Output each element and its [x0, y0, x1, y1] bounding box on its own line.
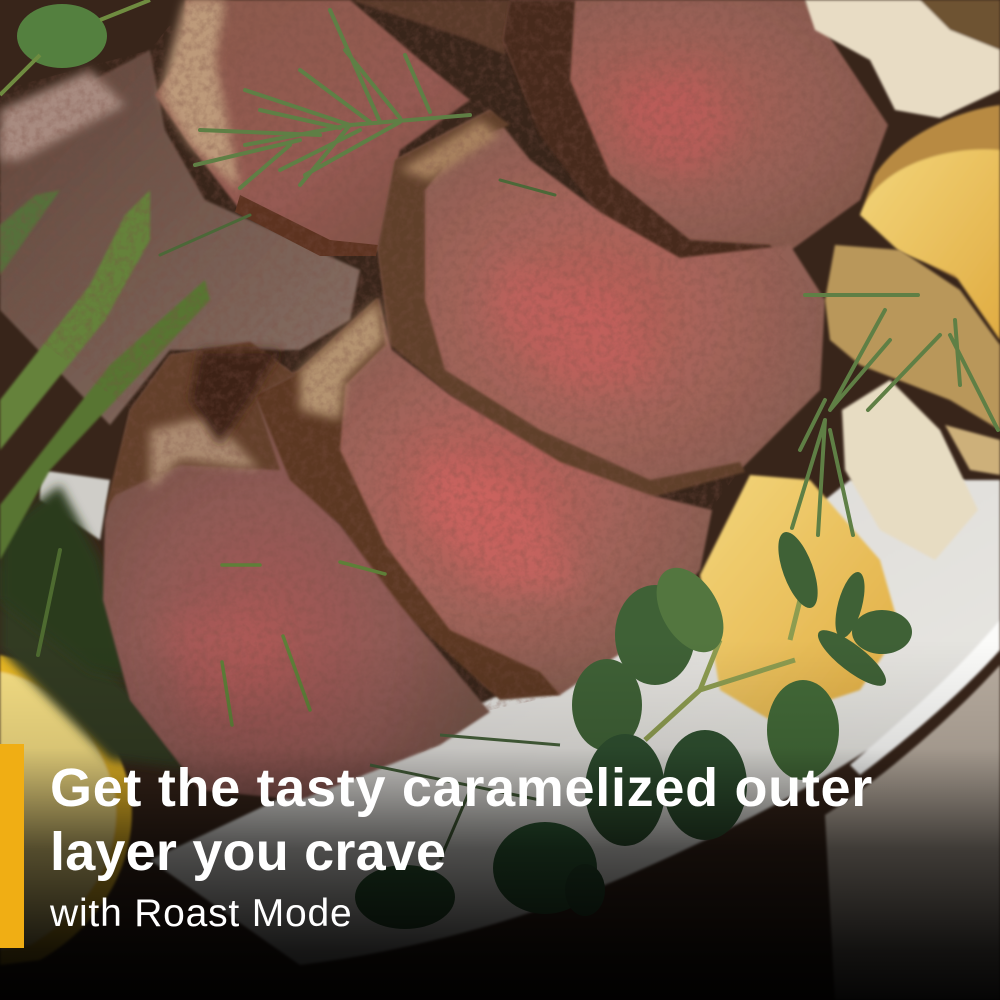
meat slice: lower centre [250, 298, 712, 700]
meat texture [0, 0, 826, 799]
dark gradient overlay [0, 640, 1000, 1000]
cloth napkin [825, 665, 1000, 1000]
roasted onion [825, 245, 1000, 560]
meat slice: middle [378, 110, 825, 498]
meat slice: top right [503, 0, 888, 262]
potatoes [700, 105, 1000, 720]
roasted garlic [805, 0, 1000, 118]
rosemary sprigs [38, 10, 998, 725]
subheading: with Roast Mode [50, 892, 352, 935]
headline: Get the tasty caramelized outer [50, 758, 873, 818]
meat slice: left back [0, 50, 360, 425]
meat slice: lower left [103, 342, 490, 800]
plate [40, 470, 1000, 965]
headline [50, 758, 873, 882]
accent bar [0, 744, 24, 948]
dark greens [0, 485, 190, 770]
asparagus [0, 190, 210, 560]
meat slice: top back [350, 0, 510, 55]
meat slice: top centre [155, 0, 470, 256]
lemon [0, 655, 132, 965]
headline: layer you crave [50, 822, 446, 882]
